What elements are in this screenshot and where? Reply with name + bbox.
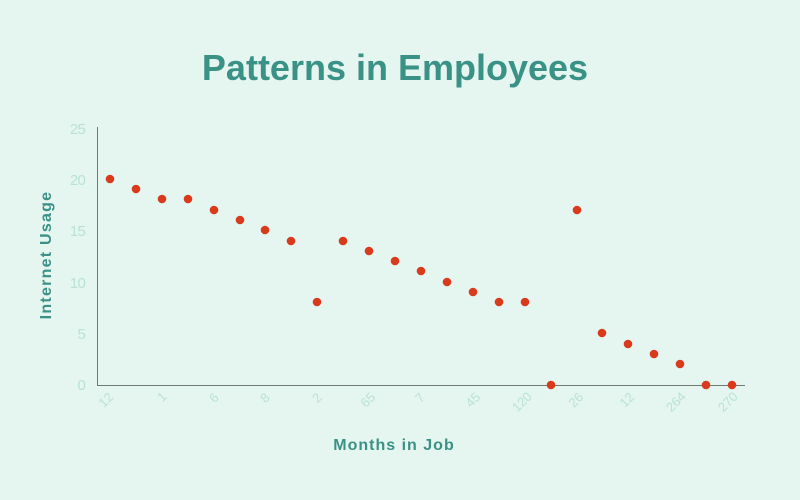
x axis tick labels: 264 xyxy=(663,389,689,415)
x axis tick labels: 8 xyxy=(257,390,273,406)
x axis tick labels: 1 xyxy=(154,389,170,405)
y axis title: Internet Usage xyxy=(38,191,55,319)
scatter points xyxy=(106,175,736,389)
x axis tick labels: 12 xyxy=(95,389,116,410)
x axis tick labels xyxy=(95,389,741,415)
y axis tick labels: 25 xyxy=(70,121,85,138)
x axis tick labels: 26 xyxy=(565,389,586,410)
x axis tick labels: 6 xyxy=(206,390,222,406)
x axis tick labels: 65 xyxy=(357,389,378,410)
x axis tick labels: 270 xyxy=(715,389,741,415)
x axis tick labels: 12 xyxy=(616,389,637,410)
y axis tick labels: 20 xyxy=(70,172,85,189)
y axis tick labels xyxy=(70,121,85,394)
axes xyxy=(98,127,745,386)
x axis tick labels: 45 xyxy=(462,389,483,410)
y axis tick labels: 10 xyxy=(70,275,85,292)
title: Patterns in Employees xyxy=(202,47,588,88)
y axis tick labels: 5 xyxy=(77,326,85,343)
x axis tick labels: 120 xyxy=(509,389,535,415)
x axis tick labels: 2 xyxy=(309,390,325,406)
x axis tick labels: 7 xyxy=(412,390,428,406)
y axis tick labels: 0 xyxy=(77,377,85,394)
x axis title: Months in Job xyxy=(333,437,455,454)
y axis tick labels: 15 xyxy=(70,223,85,240)
